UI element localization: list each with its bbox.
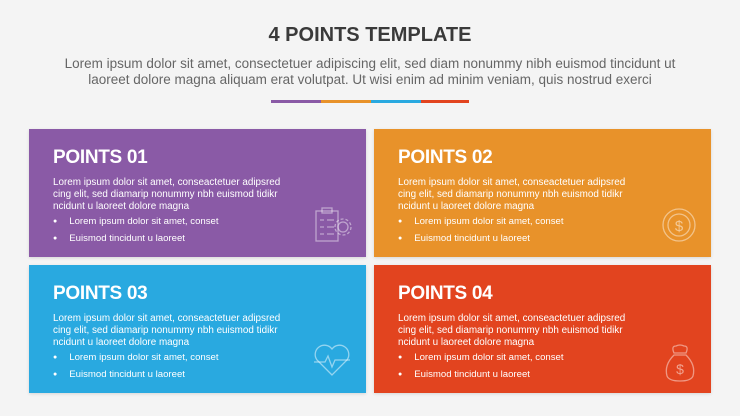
- panel: points 03: Lorem ipsum dolor sit amet, conset: [69, 352, 219, 363]
- title: 4 POINTS TEMPLATE: [268, 24, 471, 46]
- panel: points 02: [374, 129, 711, 257]
- colored divider: [271, 100, 469, 103]
- panel: points 01: Lorem ipsum dolor sit amet, conseactetuer adipsred cing elit, sed diamarip nonummy nbh euismod tidikr ncidunt u laoreet dolore magna: [53, 177, 280, 212]
- panel: points 03: [29, 265, 366, 393]
- icon: money bag: [666, 344, 694, 382]
- icon: money bag: $: [676, 361, 684, 377]
- subtitle: Lorem ipsum dolor sit amet, consectetuer adipiscing elit, sed diam nonummy nibh euismod tincidunt ut laoreet dolore magna aliquam erat volutpat. Ut wisi enim ad minim veniam, quis nostrud exerci: [65, 56, 675, 87]
- panel: points 04: POINTS 04: [398, 283, 492, 304]
- panel: points 03: Euismod tincidunt u laoreet: [69, 369, 185, 380]
- panel: points 04: Euismod tincidunt u laoreet: [414, 369, 530, 380]
- panel: points 01: Euismod tincidunt u laoreet: [69, 233, 185, 244]
- panel: points 02: Lorem ipsum dolor sit amet, conset: [414, 216, 564, 227]
- panel: points 04: Lorem ipsum dolor sit amet, conset: [414, 352, 564, 363]
- panel: points 03: Lorem ipsum dolor sit amet, conseactetuer adipsred cing elit, sed diamarip nonummy nbh euismod tidikr ncidunt u laoreet dolore magna: [53, 313, 280, 348]
- panel: points 01: POINTS 01: [53, 147, 147, 168]
- panel: points 03: POINTS 03: [53, 283, 147, 304]
- panel: points 02: Euismod tincidunt u laoreet: [414, 233, 530, 244]
- icon: heart pulse: [314, 344, 350, 376]
- panel: points 04: [374, 265, 711, 393]
- panel: points 02: Lorem ipsum dolor sit amet, conseactetuer adipsred cing elit, sed diamarip nonummy nbh euismod tidikr ncidunt u laoreet dolore magna: [398, 177, 625, 212]
- icon: coin: [662, 208, 696, 242]
- icon: coin: $: [675, 218, 684, 235]
- panel: points 02: POINTS 02: [398, 147, 492, 168]
- panel: points 04: Lorem ipsum dolor sit amet, conseactetuer adipsred cing elit, sed diamarip nonummy nbh euismod tidikr ncidunt u laoreet dolore magna: [398, 313, 625, 348]
- panel: points 01: [29, 129, 366, 257]
- panel: points 01: Lorem ipsum dolor sit amet, conset: [69, 216, 219, 227]
- icon: checklist gear: [315, 207, 352, 242]
